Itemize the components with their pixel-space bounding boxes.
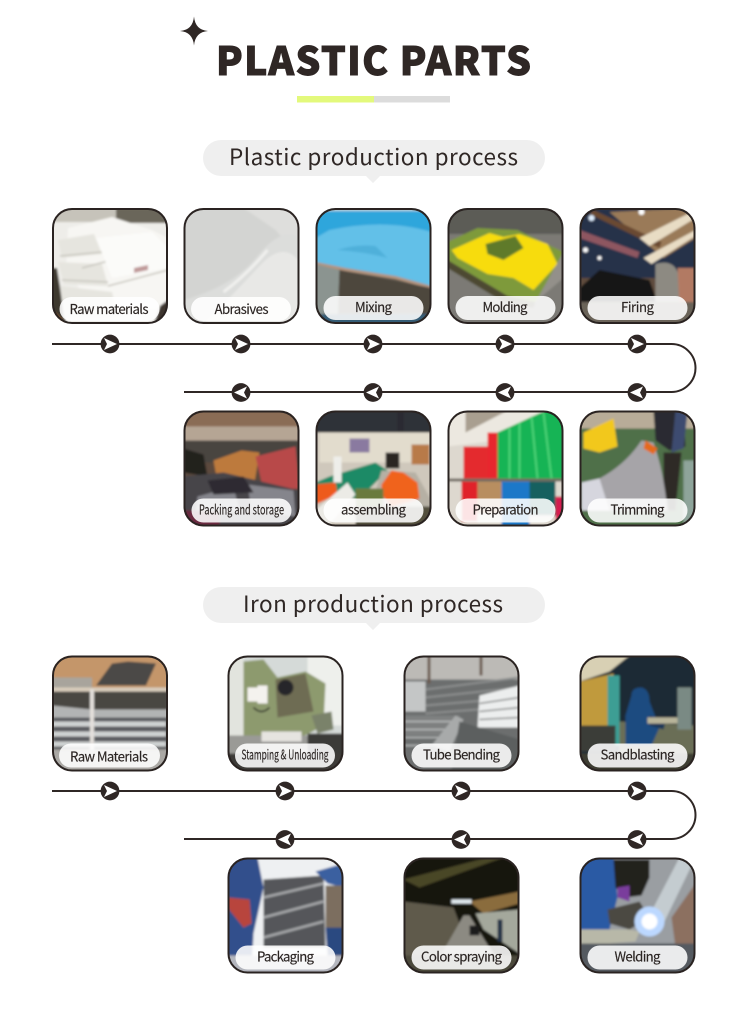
- card: Color spraying: [404, 858, 520, 974]
- card: Packaging: Packaging: [257, 946, 315, 966]
- label pill: [412, 744, 512, 768]
- card: assembling: assembling: [341, 500, 407, 518]
- card: Raw Materials (iron): Raw Materials: [70, 746, 148, 766]
- label pill: [60, 297, 160, 321]
- label pill: [59, 744, 160, 768]
- card: Raw materials: [52, 208, 168, 324]
- label pill: [324, 296, 424, 320]
- label pill: [192, 498, 292, 522]
- label pill: [588, 296, 688, 320]
- label pill: [412, 946, 512, 970]
- card: Preparation: Preparation: [472, 500, 538, 518]
- heading: plastic production process: Plastic production process: [229, 140, 518, 172]
- card: Packaging: [228, 858, 344, 974]
- heading: iron production process: Iron production process: [243, 587, 503, 619]
- card: Color spraying: Color spraying: [421, 946, 503, 966]
- label pill: [236, 946, 336, 970]
- label pill: [588, 946, 688, 970]
- card: assembling: [316, 410, 432, 526]
- card: Firing: Firing: [621, 297, 655, 316]
- card: Tube Bending: [404, 656, 520, 772]
- card: Mixing: [316, 208, 432, 324]
- card: Tube Bending: Tube Bending: [423, 744, 501, 764]
- title accent bar: [297, 96, 450, 102]
- card: Sandblasting: Sandblasting: [600, 744, 675, 764]
- card: Molding: Molding: [482, 297, 528, 316]
- label pill: [456, 498, 556, 522]
- card: Welding: [580, 858, 696, 974]
- card: Preparation: [448, 410, 564, 526]
- process line: plastic: [52, 335, 696, 402]
- card: Sandblasting: [580, 656, 696, 772]
- card: Trimming: Trimming: [610, 500, 665, 518]
- card: Packing and storage: Packing and storage: [199, 500, 284, 518]
- label pill: [324, 498, 424, 522]
- label pill: [235, 744, 335, 768]
- title: PLASTIC PARTS: [216, 31, 531, 87]
- card: Trimming: [580, 410, 696, 526]
- icon: arrow right: [101, 335, 119, 353]
- card: Mixing: Mixing: [355, 297, 393, 316]
- icon: sparkle star: [180, 16, 208, 46]
- card: Abrasives: [184, 208, 300, 324]
- card: Stamping & Unloading: Stamping & Unloading: [242, 744, 329, 764]
- heading: iron production process: [203, 587, 545, 630]
- card: Molding: [448, 208, 564, 324]
- card: Packing and storage: [184, 410, 300, 526]
- label pill: [456, 296, 556, 320]
- card: Raw materials: Raw materials: [70, 299, 148, 318]
- process line: iron: [52, 782, 696, 849]
- card: Abrasives: Abrasives: [214, 299, 268, 318]
- card: Welding: Welding: [614, 946, 661, 966]
- card: Raw Materials (iron): [52, 656, 168, 772]
- card: Stamping & Unloading: [228, 656, 344, 772]
- card: Firing: [580, 208, 696, 324]
- label pill: [588, 744, 688, 768]
- label pill: [191, 297, 291, 321]
- heading: plastic production process: [203, 140, 545, 183]
- icon: arrow right: [101, 782, 119, 800]
- label pill: [588, 498, 688, 522]
